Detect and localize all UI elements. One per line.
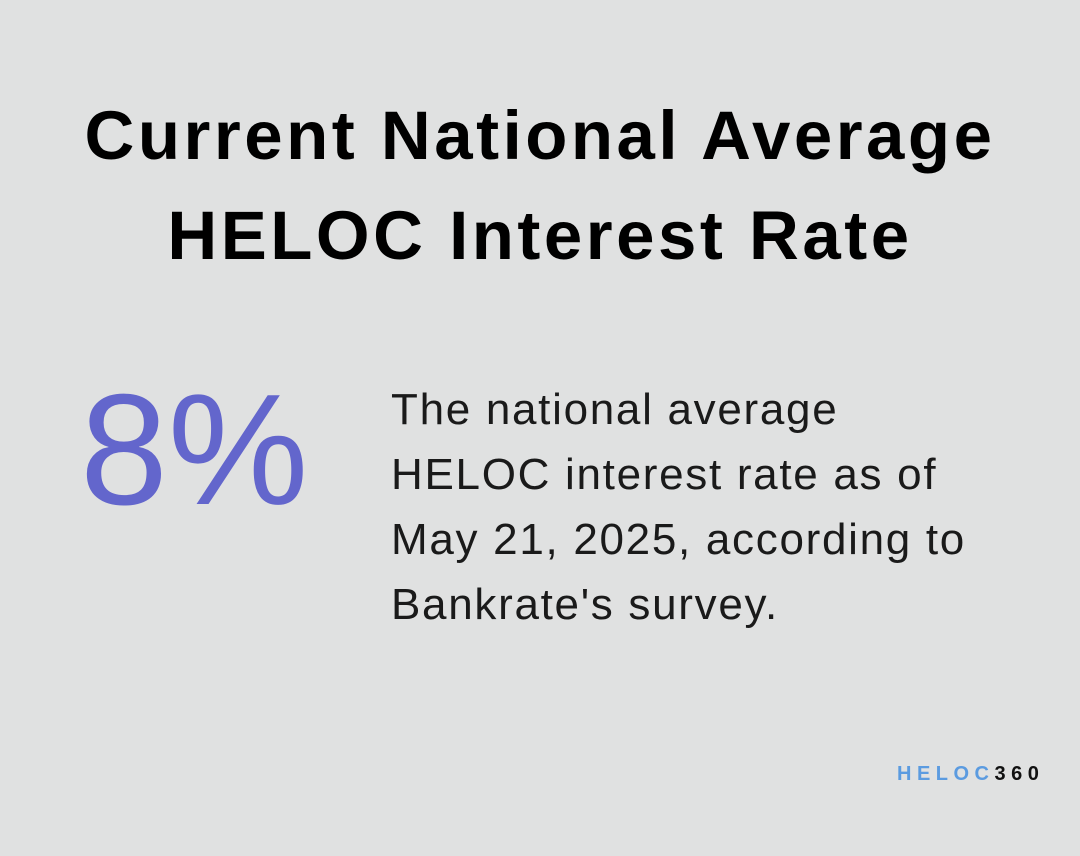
title: HELOC Interest Rate	[167, 197, 913, 274]
title: Current National Average	[85, 97, 995, 174]
description text	[391, 385, 966, 629]
logo: HELOC360	[897, 763, 1044, 785]
description text: Bankrate's survey.	[391, 580, 779, 629]
description text: May 21, 2025, according to	[391, 515, 966, 564]
description text: The national average	[391, 385, 838, 434]
title	[85, 97, 995, 274]
description text: HELOC interest rate as of	[391, 450, 937, 499]
big stat: 8%	[80, 362, 308, 538]
